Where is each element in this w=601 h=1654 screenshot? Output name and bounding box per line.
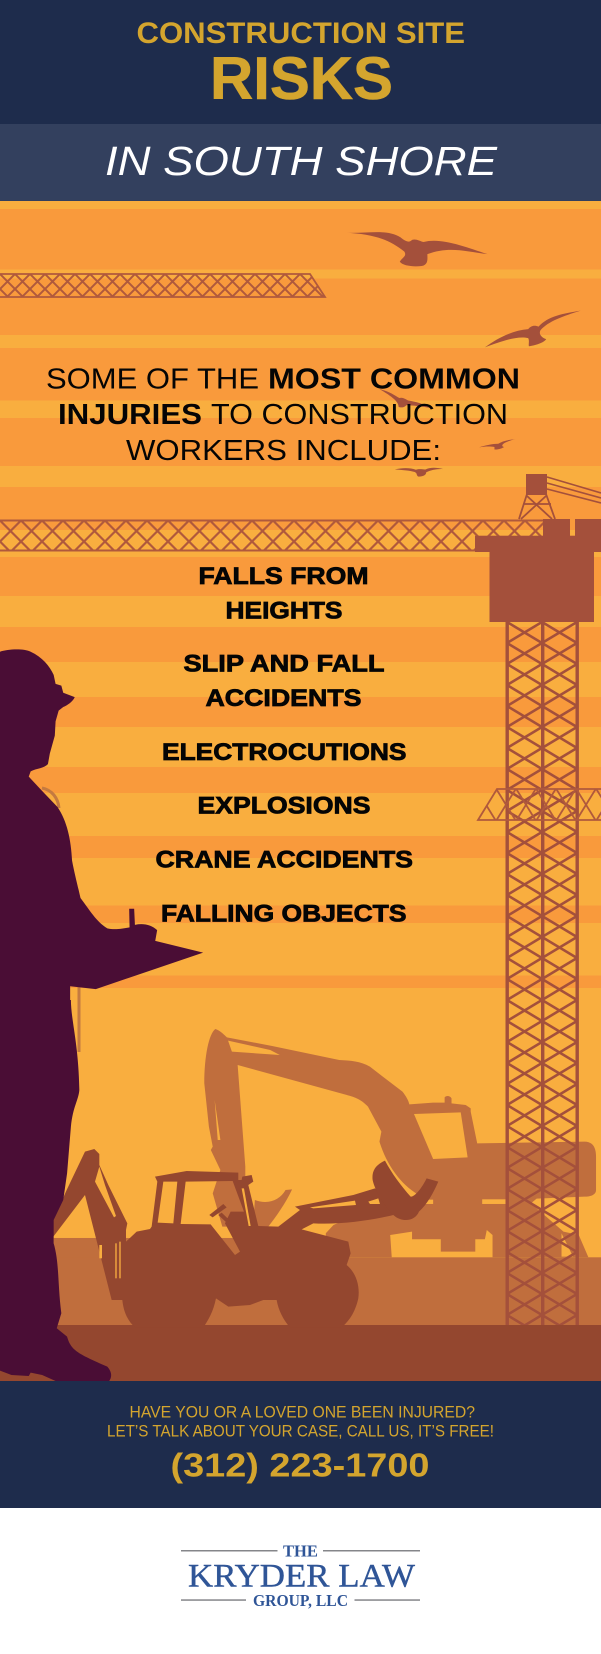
injury list: HEIGHTS	[226, 598, 342, 624]
lower crane boom	[0, 520, 547, 550]
phone number: (312) 223-1700	[170, 1447, 430, 1484]
worker silhouette	[0, 649, 203, 1381]
logo text: firm name: THE	[283, 1542, 318, 1561]
excavator and ground	[0, 1029, 601, 1327]
header panel	[0, 0, 601, 124]
intro text	[46, 364, 520, 467]
logo panel	[0, 1508, 601, 1654]
logo text: firm name: KRYDER LAW	[188, 1559, 416, 1595]
intro text: MOST COMMON	[268, 364, 520, 396]
dark foreground ground	[0, 1325, 601, 1381]
tower crane cross arm	[478, 789, 601, 820]
injury list: FALLS FROM	[198, 563, 368, 590]
intro text: TO CONSTRUCTION	[211, 399, 508, 431]
injury list: FALLING OBJECTS	[161, 900, 406, 928]
scene background: orange stripes	[0, 201, 601, 1381]
call to action panel: LET’S TALK ABOUT YOUR CASE, CALL US, IT’S FREE!	[107, 1423, 494, 1441]
injury list: CRANE ACCIDENTS	[156, 846, 413, 874]
title line one: CONSTRUCTION SITE	[136, 17, 465, 50]
injury list: ELECTROCUTIONS	[162, 739, 406, 766]
subtitle text: IN SOUTH SHORE	[105, 138, 498, 184]
intro text: WORKERS INCLUDE:	[126, 435, 441, 467]
injury list: EXPLOSIONS	[198, 792, 370, 820]
tower crane mast	[506, 622, 579, 1325]
title: RISKS: RISKS	[210, 45, 393, 112]
subtitle band	[0, 124, 601, 201]
birds	[345, 232, 581, 477]
logo text: firm name: GROUP, LLC	[253, 1591, 348, 1610]
injury list	[156, 563, 413, 928]
logo text: firm name	[188, 1542, 416, 1610]
call to action panel	[0, 1381, 601, 1508]
tower crane cab	[475, 519, 601, 622]
call to action panel: HAVE YOU OR A LOVED ONE BEEN INJURED?	[130, 1404, 475, 1422]
intro text: SOME OF THE	[46, 364, 259, 396]
intro text: INJURIES	[58, 399, 202, 431]
upper crane boom	[0, 274, 325, 297]
tractor backhoe	[53, 1149, 438, 1327]
worker strap	[42, 788, 79, 1052]
injury list: SLIP AND FALL	[184, 650, 384, 678]
tower crane top frame	[519, 474, 601, 519]
tractor loader bucket	[372, 1161, 438, 1220]
injury list: ACCIDENTS	[206, 685, 362, 712]
